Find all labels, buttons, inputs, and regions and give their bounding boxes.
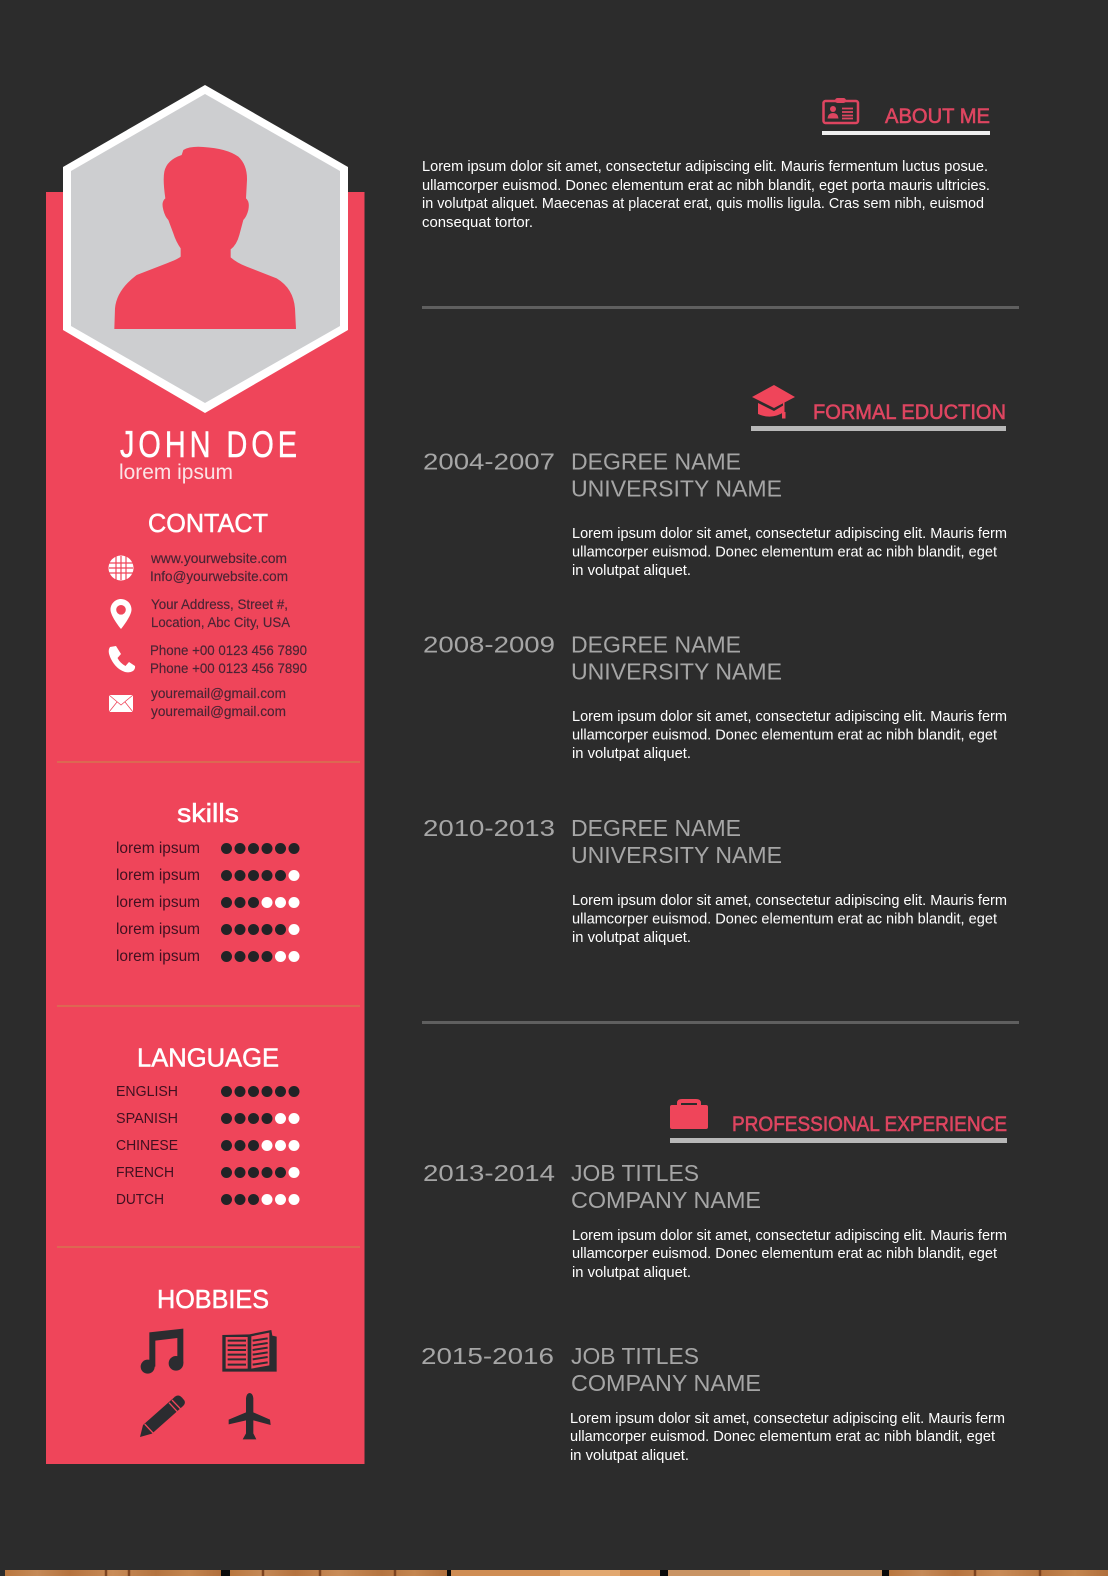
education entry 2: 2008-2009 bbox=[423, 632, 555, 658]
language row: Chinese: CHINESE bbox=[116, 1138, 178, 1154]
section: professional experience bbox=[421, 1101, 1007, 1464]
education entry 2: in volutpat aliquet. bbox=[572, 746, 691, 762]
phone lines bbox=[150, 642, 307, 676]
name: JOHN DOE bbox=[120, 425, 297, 466]
skill row 5: lorem ipsum bbox=[116, 948, 200, 965]
icon: music note bbox=[141, 1329, 183, 1374]
section: skills: skills bbox=[177, 798, 239, 828]
phone lines: Phone +00 0123 456 7890 bbox=[150, 642, 307, 658]
subtitle: lorem ipsum bbox=[119, 460, 233, 484]
job entry 2: 2015-2016 bbox=[421, 1343, 554, 1369]
website lines: www.yourwebsite.com bbox=[150, 550, 287, 566]
heading: ABOUT ME bbox=[885, 105, 990, 128]
email lines: youremail@gmail.com bbox=[151, 703, 286, 719]
language row: English: ENGLISH bbox=[116, 1084, 178, 1100]
job entry 1: Lorem ipsum dolor sit amet, consectetur adipiscing elit. Mauris ferm bbox=[572, 1228, 1007, 1244]
education entry 2: ullamcorper euismod. Donec elementum erat ac nibh blandit, eget bbox=[572, 728, 997, 744]
job entry 2: COMPANY NAME bbox=[571, 1370, 761, 1396]
language row: Chinese bbox=[116, 1138, 300, 1154]
icon: open book bbox=[222, 1330, 277, 1372]
panel: sidebar bbox=[46, 192, 364, 1464]
language row: Spanish: SPANISH bbox=[116, 1111, 178, 1127]
phone lines: Phone +00 0123 456 7890 bbox=[150, 660, 307, 676]
education entry 1: UNIVERSITY NAME bbox=[571, 476, 782, 502]
icon: envelope bbox=[109, 695, 133, 712]
job entry 2: JOB TITLES bbox=[571, 1343, 699, 1369]
education entry 3: UNIVERSITY NAME bbox=[571, 842, 782, 868]
education entry 2 bbox=[423, 632, 1007, 762]
text block: Lorem ipsum dolor sit amet, consectetur adipiscing elit. Mauris fermentum luctus posue. bbox=[422, 159, 988, 175]
job entry 1: COMPANY NAME bbox=[571, 1187, 761, 1213]
education entry 1: DEGREE NAME bbox=[571, 448, 741, 474]
education entry 3 bbox=[423, 815, 1007, 946]
job entry 1: 2013-2014 bbox=[423, 1160, 555, 1186]
website lines bbox=[150, 550, 288, 584]
skill row 1: lorem ipsum bbox=[116, 840, 200, 857]
job entry 2: in volutpat aliquet. bbox=[570, 1448, 689, 1464]
section: hobbies: HOBBIES bbox=[157, 1284, 269, 1314]
icon: id card bbox=[824, 98, 858, 123]
address lines: Your Address, Street #, bbox=[151, 596, 288, 612]
skill row 3: lorem ipsum bbox=[116, 894, 200, 911]
skill row 2: lorem ipsum bbox=[116, 867, 200, 884]
icon: map pin bbox=[110, 599, 132, 629]
job entry 2: ullamcorper euismod. Donec elementum erat ac nibh blandit, eget bbox=[570, 1429, 995, 1445]
icon: globe bbox=[108, 556, 134, 580]
section: language bbox=[116, 1042, 300, 1208]
skill row 1 bbox=[116, 840, 300, 857]
education entry 3: in volutpat aliquet. bbox=[572, 930, 691, 946]
text block: consequat tortor. bbox=[422, 215, 533, 231]
job entry 1 bbox=[423, 1160, 1007, 1281]
section: language: LANGUAGE bbox=[137, 1042, 279, 1072]
icon: phone bbox=[109, 646, 135, 672]
address lines bbox=[151, 596, 291, 630]
heading: PROFESSIONAL EXPERIENCE bbox=[732, 1113, 1007, 1136]
education entry 3: ullamcorper euismod. Donec elementum erat ac nibh blandit, eget bbox=[572, 912, 997, 928]
section: contact: CONTACT bbox=[148, 508, 268, 538]
job entry 1: JOB TITLES bbox=[571, 1160, 699, 1186]
education entry 2: Lorem ipsum dolor sit amet, consectetur adipiscing elit. Mauris ferm bbox=[572, 709, 1007, 725]
language row: Dutch bbox=[116, 1192, 300, 1208]
job entry 1: ullamcorper euismod. Donec elementum erat ac nibh blandit, eget bbox=[572, 1246, 997, 1262]
text block: ullamcorper euismod. Donec elementum erat ac nibh blandit, eget porta mauris ultricies. bbox=[422, 178, 990, 194]
education entry 3: Lorem ipsum dolor sit amet, consectetur adipiscing elit. Mauris ferm bbox=[572, 893, 1007, 909]
text block bbox=[422, 159, 990, 231]
skill row 3 bbox=[116, 894, 300, 911]
section: skills bbox=[116, 798, 300, 965]
address lines: Location, Abc City, USA bbox=[151, 614, 291, 630]
heading: FORMAL EDUCTION bbox=[813, 401, 1006, 424]
icon: graduation cap bbox=[752, 385, 795, 418]
wood strip bbox=[5, 1570, 1108, 1576]
email lines bbox=[151, 685, 286, 719]
section: contact bbox=[108, 508, 307, 719]
job entry 1: in volutpat aliquet. bbox=[572, 1265, 691, 1281]
website lines: Info@yourwebsite.com bbox=[150, 568, 288, 584]
language row: Dutch: DUTCH bbox=[116, 1192, 164, 1208]
education entry 1: in volutpat aliquet. bbox=[572, 563, 691, 579]
education entry 3: 2010-2013 bbox=[423, 815, 555, 841]
skill row 5 bbox=[116, 948, 300, 965]
icon: pencil bbox=[140, 1396, 185, 1437]
job entry 2: Lorem ipsum dolor sit amet, consectetur adipiscing elit. Mauris ferm bbox=[570, 1411, 1005, 1427]
language row: Spanish bbox=[116, 1111, 300, 1127]
education entry 1: ullamcorper euismod. Donec elementum erat ac nibh blandit, eget bbox=[572, 544, 997, 560]
email lines: youremail@gmail.com bbox=[151, 685, 286, 701]
skill row 4: lorem ipsum bbox=[116, 921, 200, 938]
icon: briefcase bbox=[670, 1101, 708, 1129]
text block: in volutpat aliquet. Maecenas at placerat erat, quis mollis ligula. Cras sem nibh, euismod bbox=[422, 196, 984, 212]
language row: English bbox=[116, 1084, 300, 1100]
section: about me bbox=[422, 98, 990, 231]
section: hobbies bbox=[140, 1284, 277, 1439]
skill row 2 bbox=[116, 867, 300, 884]
skill row 4 bbox=[116, 921, 300, 938]
icon: airplane bbox=[229, 1393, 271, 1439]
job entry 2 bbox=[421, 1343, 1005, 1464]
language row: French: FRENCH bbox=[116, 1165, 174, 1181]
education entry 3: DEGREE NAME bbox=[571, 815, 741, 841]
icon: person silhouette bbox=[114, 147, 296, 329]
hexagon photo frame bbox=[63, 85, 348, 413]
education entry 1: 2004-2007 bbox=[423, 448, 555, 474]
name bbox=[119, 425, 297, 484]
education entry 2: DEGREE NAME bbox=[571, 632, 741, 658]
section: formal education bbox=[423, 385, 1007, 946]
language row: French bbox=[116, 1165, 300, 1181]
education entry 1 bbox=[423, 448, 1007, 579]
education entry 2: UNIVERSITY NAME bbox=[571, 658, 782, 684]
education entry 1: Lorem ipsum dolor sit amet, consectetur adipiscing elit. Mauris ferm bbox=[572, 526, 1007, 542]
